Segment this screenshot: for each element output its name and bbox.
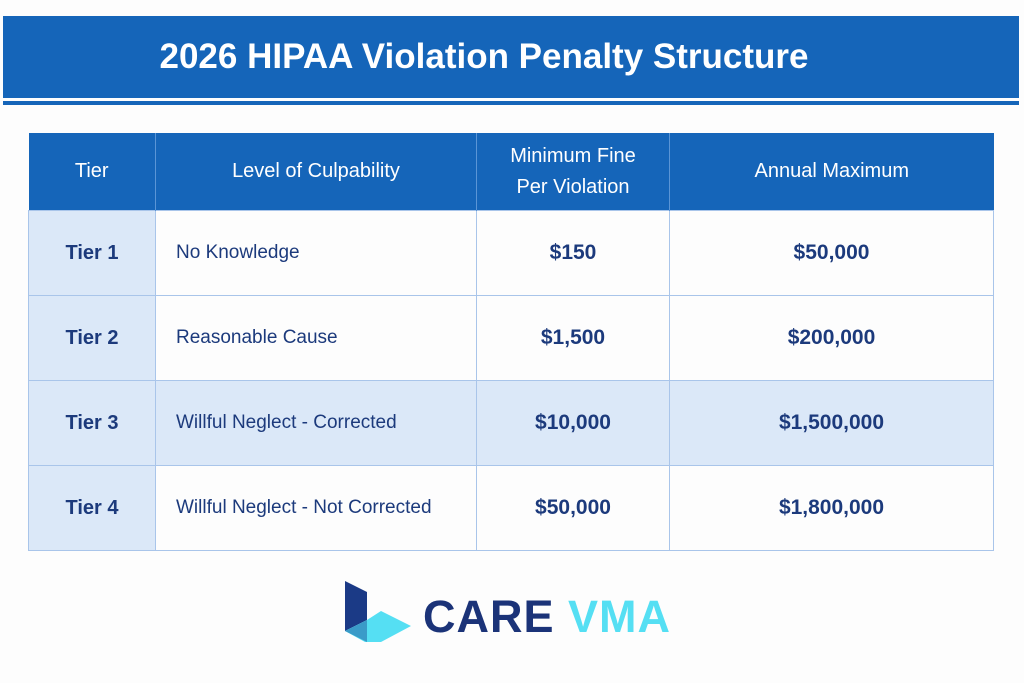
- penalty table: $10,000: [535, 411, 611, 434]
- penalty table: Tier 2: [66, 326, 118, 348]
- penalty table: $50,000: [535, 496, 611, 519]
- penalty table: Per Violation: [516, 176, 630, 198]
- penalty table: Reasonable Cause: [176, 327, 338, 348]
- logo text: CARE VMA: [423, 591, 671, 642]
- title banner: [3, 16, 1019, 98]
- penalty table: Level of Culpability: [232, 160, 400, 182]
- penalty table: Tier: [75, 160, 109, 182]
- icon: logo mark: [345, 581, 411, 642]
- penalty table: $200,000: [788, 326, 875, 349]
- penalty table: Tier 4: [66, 496, 118, 518]
- penalty table: Tier 1: [66, 242, 118, 264]
- penalty table: Willful Neglect - Corrected: [176, 412, 397, 433]
- penalty table: $50,000: [794, 241, 869, 264]
- penalty table: Annual Maximum: [754, 160, 909, 182]
- penalty table: $150: [550, 241, 596, 264]
- logo: Care VMA: [345, 581, 671, 642]
- penalty table: $1,500: [541, 326, 605, 349]
- penalty table: No Knowledge: [176, 242, 300, 263]
- penalty table: Minimum Fine: [510, 144, 636, 166]
- penalty table: $1,500,000: [779, 411, 884, 434]
- penalty table: Willful Neglect - Not Corrected: [176, 497, 432, 518]
- title banner: 2026 HIPAA Violation Penalty Structure: [160, 37, 808, 76]
- penalty table: $1,800,000: [779, 496, 884, 519]
- penalty table: Tier 3: [66, 412, 118, 434]
- penalty table: [28, 133, 994, 551]
